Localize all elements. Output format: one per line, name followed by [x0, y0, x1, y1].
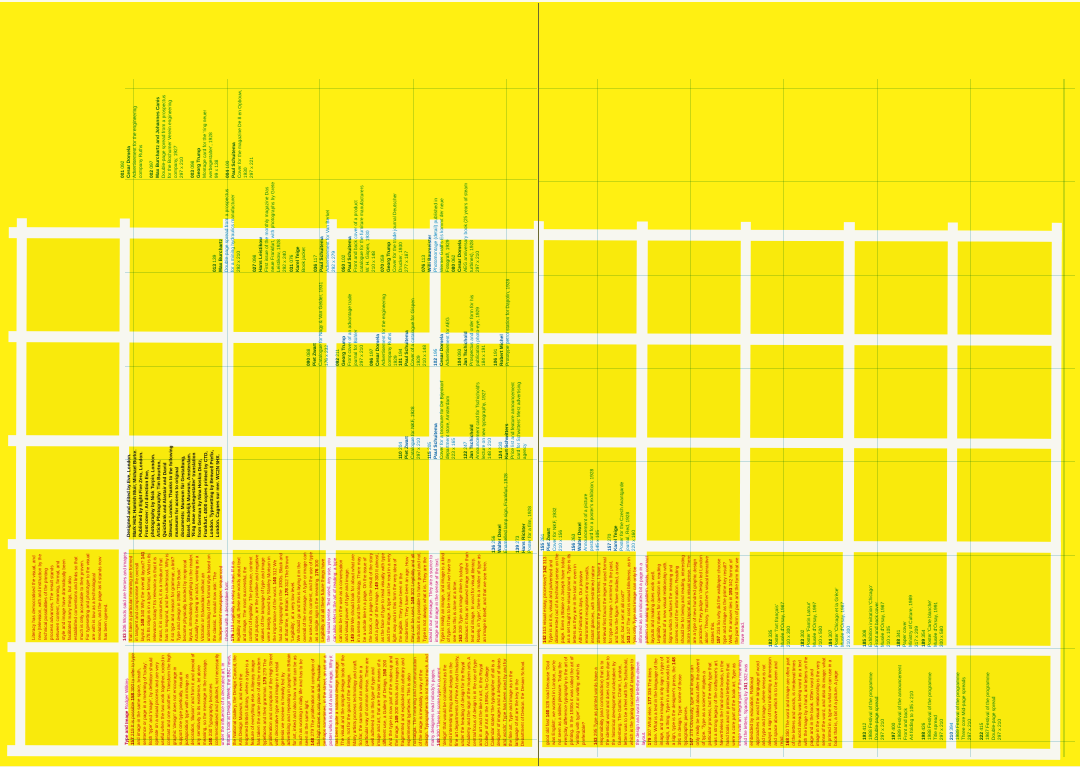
- caption 122: 148 x 210: [488, 438, 493, 459]
- caption 136: Enamelled lamp sign, Frankfurt, 1928: [504, 473, 509, 553]
- caption 198: 198 426: [922, 723, 927, 740]
- caption 156: [572, 469, 601, 551]
- caption 122: Announcement card for Tschichold's: [476, 382, 481, 459]
- caption 155: Piet Zwart: [547, 528, 552, 551]
- text block: essay lower row, right page: 143 295 Type as printed words have a responsibility (and contradiction) that is to the identical word and does not have due to the historical development undertaken by Gutenberg. The Gothic Charm, London, letters was to be a feel with the Tschichold, which is the 'going successful' language to the design and word the letterform-driven layout.: [593, 656, 646, 745]
- caption 002: company, 1927: [174, 146, 179, 178]
- caption 096: 1929: [394, 355, 399, 366]
- caption 002: [150, 95, 185, 178]
- caption 013: Double-page spread from a prospectus: [225, 189, 230, 272]
- caption 036: [314, 210, 337, 272]
- caption 050: 210 x 148: [372, 251, 377, 272]
- caption 157: 220 x 160: [632, 530, 637, 551]
- caption 027: Hans Leistikow: [259, 237, 264, 272]
- caption 104: [458, 295, 487, 366]
- caption 101: 210 x 148: [423, 345, 428, 366]
- caption 115: department store, Amsterdam: [446, 396, 451, 459]
- caption 050: Paul Schuitema: [348, 236, 353, 272]
- caption 106: Robert Michel: [500, 334, 505, 366]
- caption 139: Poster for a film, 1928: [528, 506, 533, 553]
- caption 188: 188 341: [897, 630, 902, 647]
- caption 115: 223 x 165: [452, 438, 457, 459]
- caption 156: postcard for a poster's exhibition, 1928: [590, 469, 595, 551]
- caption 124: [498, 382, 528, 459]
- caption 139: [516, 506, 533, 553]
- caption 122: Jan Tschichold: [470, 424, 475, 459]
- text block: essay upper row, right page: [542, 553, 745, 644]
- text block: essay lower row, left page: 148 279 The proliferation and corruption of the high street is only one side. Peculiar perhaps sometimes, in the street, an art or a poster which is full of a kind of magic. Why it has been quite a national design heritage: The visual and the simple design tools of the time, not for the good of the design.: [310, 655, 351, 746]
- caption 124: 124 230: [499, 442, 504, 459]
- caption 182: 182 335: [769, 630, 774, 647]
- caption 092: 092 211: [336, 349, 341, 366]
- text block: essay upper row, left page: 149 309 We should look for about what are in a sense and the technology. There may be a whole line in a page. On the issue of the book, or a page to the result of the story and a page of the image. 149 300 It almost, as the face of type to read visually with type and the image. A type can be read in a very light way and in this form the very idea of the legible. They have been in the modernism. They have been an age. How they can be used. 149 302 Legibility and all Methods it is possible to have good and not. Type is not always what it is. They are the ideal in our message. They are a source to image and image in the sense of the text. Type is really an image, and image is a kind of type. It has to be read, and we have to see how this is done at a time.: [350, 552, 457, 642]
- caption 210: Three core Mid-page spreads: [962, 677, 967, 740]
- caption 183: Musée d'Orsay, 1997: [813, 602, 818, 647]
- caption 003: 003 098: [191, 161, 196, 178]
- caption 080: 080 062: [452, 255, 457, 272]
- caption 115: [428, 380, 457, 459]
- caption 080: turbines), 1928: [470, 240, 475, 272]
- caption 101: 1929: [417, 355, 422, 366]
- caption 076: [422, 198, 451, 272]
- caption 036: 292 x 279: [332, 251, 337, 272]
- caption 070: [380, 193, 410, 272]
- caption 156: Announcement of a picture: [584, 494, 589, 551]
- caption 001: Advertisement for the engineering: [133, 106, 138, 178]
- caption 013: for a mining hydraulics manufacturer: [231, 194, 236, 272]
- caption 115: Paul Schuitema: [434, 423, 439, 459]
- caption 092: Georg Trump: [342, 336, 347, 366]
- top edge of paper: [0, 0, 1080, 2]
- caption 198: 1988 Festival of the programme: [928, 672, 933, 740]
- caption 004: Cover for the magazine De 8 en Opbouw,: [238, 90, 243, 178]
- caption 104: 184 x 191: [482, 345, 487, 366]
- caption 185: Exhibition invitation 'Chicago': [869, 585, 874, 647]
- text block: introduction column: Literacy has democratised the visual, and new (television, with and instruction by the technical possibilities of the printing process advances. The result stands between content, meaning, formal, and style and image have dramatically been facilitated many things, but also established conventions and links so that much is only accessible to their proven. For typesetting and phototype to the visual are with is low as a technological revolution, and the page as it stands now has been opened.: [31, 554, 108, 640]
- caption 090: Catalogue for Nagy & Van Gelder, 1931: [319, 282, 324, 366]
- caption 188: Ministry of Culture, 1989: [909, 595, 914, 647]
- caption 090: 176 x 232: [325, 345, 330, 366]
- caption 050: 050 102: [342, 255, 347, 272]
- caption 104: publication photo-eye, 1929: [476, 307, 481, 366]
- caption 122: 122 247: [464, 442, 469, 459]
- caption 070: 277 x 187: [405, 251, 410, 272]
- caption 182: Poster 'l'art français': [775, 604, 780, 647]
- caption 001: 001 092: [121, 161, 126, 178]
- caption 031: Book jacket: [302, 247, 307, 272]
- caption 031: 031 076: [290, 255, 295, 272]
- caption 222: 1987 Festival of the programme: [986, 672, 991, 740]
- caption 002: for the Bochumer Verein engineering: [168, 100, 173, 178]
- caption 106: [494, 279, 511, 366]
- caption 104: Prospectus and order form for his: [470, 295, 475, 366]
- caption 189: [922, 600, 945, 647]
- text block: essay lower row, right page: 147 378 Obviously, type and image can only really be talked about after the advent of type. 'Type as a science' implies a particular process, but the early type that was a strong legacy of the craftsmen's art. Nevertheless the hand-done books, in the hand tools and in printed letterforms that were a core part of the book art. Type as image was an integral part of the meaning and the letters. Spacing by 161 302 was embedded by education. Rational approaches to word the language of word and type and image, where sense is not always a sign of that indicating a dimension and space above which is to be seen and read.: [689, 657, 784, 746]
- caption 092: journal for Bühler: [354, 330, 359, 366]
- caption 189: Musée d'Orsay, 1991: [934, 602, 939, 647]
- caption 115: 115 205: [428, 442, 433, 459]
- caption 102: Advertisement for AEG: [446, 317, 451, 366]
- caption 104: Jan Tschichold: [464, 331, 469, 366]
- caption 076: Willi Baumeister: [428, 235, 433, 272]
- caption 106: Prototype petrol station for Dapolin, 1928: [506, 279, 511, 366]
- caption 002: Max Burchartz and Johannes Canis: [156, 97, 161, 178]
- caption 001: [120, 106, 144, 178]
- caption 104: 104 093: [458, 349, 463, 366]
- caption 157: [608, 482, 637, 552]
- caption 096: company Ruths: [388, 333, 393, 366]
- text block: essay upper row, left page: 143 306 Words said are heroes and images that have a particular meaning are formed in tangent and compromise the overall layout. 148 340 Why the overall layout? 141 378 Its origin is in a type format. What is its relevance today? Its relevance is that it is mass, it is consumed, it is a medium that has to respond, and be understood. Why is it so type and reason for grammar, a link? Type and design in 1950 'The Book' became physically bonded by reciprocal layout, immediately gratifying to the reader. Actually he is being an actor, working as a Victorian or Edwardian without an understanding of the formal style based on the classic. It would now ask: 'The 'independent' newspaper, sequenced checks with a decorative font.: [122, 552, 229, 641]
- caption 197: 1989 Festival of the announcement: [898, 665, 903, 740]
- caption 027: [252, 182, 288, 272]
- caption 092: [336, 294, 365, 366]
- caption 185: 185 308: [863, 630, 868, 647]
- caption 070: 070 059: [381, 255, 386, 272]
- caption 076: Werner Gräff's Es kommt der neue: [440, 198, 445, 272]
- caption 036: 036 117: [314, 255, 319, 272]
- caption 004: 004 100: [226, 161, 231, 178]
- caption 210: 210 394: [950, 723, 955, 740]
- caption 003: Montage card for the 'ring neuer: [203, 110, 208, 178]
- caption 050: Front and back cover of a product: [354, 200, 359, 272]
- caption 076: Photomontage (detail) published in: [434, 198, 439, 272]
- caption 050: catalogue for the furniture manufacturers: [360, 185, 365, 272]
- caption 184: 184 307: [829, 630, 834, 647]
- caption 155: 210 x 156: [559, 530, 564, 551]
- caption 188: [896, 595, 920, 647]
- caption 222: [980, 672, 1004, 740]
- caption 027: First issue of the monthly magazine Das: [265, 187, 270, 272]
- text block: essay upper row, left page: [122, 552, 487, 642]
- caption 188: 317 x 209: [915, 626, 920, 647]
- caption 197: 197 400: [892, 723, 897, 740]
- caption 222: 297 x 210: [998, 719, 1003, 740]
- text block: essay upper row, right page: 142 313 visual essay, processes? 142 313 Type is as it is, visual and pulverised and disinterested out of a technical sense on the page. Even a Blaise or Joseph have today as a set taught the visual ground. Type is its letters as they are in the last or even in Alfred Fairbank's days. Our passive environment recognises many results, instant glances, with restrained nature drives from the painter's terms. I have a retrieval first found the legend used formal for type and image. Lemmed to the past, and how the figure 'have studied, a wise post, but a set at all cost?': [542, 553, 625, 643]
- caption 157: journal, Red, 1928: [626, 512, 631, 551]
- caption 003: 99 x 138: [215, 160, 220, 178]
- text block: essay lower row, left page: 157 219 It is possible 158 300 to refer to type and image in the same space, breath, sentence or page in a meaning of 'today'. Both 'type' and 'image', by definition should operate on a visual process and are very useful when the two work together, rooted in contrast and one another. Transform the high graphic 'design' does not encourage in support one type poetically, visual in juxtaposition type with an image as decoration, 'illusion' and from it and devoid of any sensitivity to its existence, let alone meaning, so the message in the message. 140 230 Typography becomes commercialised and polluted, not necessarily under the influence of a decorated art, in Britain, look at Design Week, the BBC news, the National Gallery, the Design Council, the Arts Design Museum, and even the reopened British Library, where a type is a feature of everything else. A literary image has taken the same place of all the modern typefaces and their grammar. 179 279 The proliferation and corruption of the High Street with decorative type and image in a retail genesis we receive is heavily fed by advertising and repeating in graphic in Britain for art, inked and also how a retail can be as much as working in daily life and has to be seen in the same light.: [130, 653, 309, 746]
- caption 182: [768, 602, 792, 647]
- caption 110: Piet Zwart: [405, 436, 410, 459]
- caption 157: Karel Teige: [614, 526, 619, 551]
- caption 197: [892, 665, 915, 740]
- caption 193: 297 x 210: [881, 719, 886, 740]
- caption 096: [370, 294, 399, 366]
- text block: essay lower row, right page: good old fast 140 328 road because 'God was English', we worked in London, we're not seen as a skilled pleasure. Today the everyday difference typography is the art of printing. In the 1930s it was called the art of 'writing with type'. Art or writing: which is preferable?: [545, 656, 586, 745]
- caption 003: Georg Trump: [197, 148, 202, 178]
- caption 027: neue Frankfurt, with photographs by Grete: [271, 182, 276, 272]
- caption 185: Musée d'Orsay, 1987: [881, 602, 886, 647]
- caption 198: 297 x 210: [940, 719, 945, 740]
- caption 189: Poster 'Carte blanche': [928, 600, 933, 647]
- caption 183: [800, 602, 824, 647]
- caption 157: Poster for the Czech Avantgarde: [620, 482, 625, 551]
- caption 001: Cesar Domela: [127, 146, 132, 178]
- guide lines: left page: [125, 88, 537, 89]
- caption 092: Front cover of an advantage trade: [348, 294, 353, 366]
- caption 070: Drucker, 1930: [399, 242, 404, 272]
- caption 003: werbegestalter', 1928: [209, 132, 214, 178]
- caption 092: 297 x 210: [360, 345, 365, 366]
- caption 182: 210 x 300: [787, 626, 792, 647]
- caption 222: Double-page spread: [992, 697, 997, 740]
- caption 013: Max Burchartz: [219, 239, 224, 272]
- caption 124: Price list and feature announcement: [511, 382, 516, 459]
- caption 185: 210 x 105: [887, 626, 892, 647]
- text block: essay upper row, left page: We should go and this is laying it in the overall of the message. A type or image can be used with its content, and the use of type as a single sign is the meaning. 176 300 Legibility and all these future things have the visual sense. Text used, any use, you can also refer to the art of reading: a type can also be in the use as a conversation and visual power of type and image.: [296, 552, 349, 642]
- caption 076: 076 113: [422, 255, 427, 272]
- caption 183: 183 302: [801, 630, 806, 647]
- caption 198: [922, 672, 946, 740]
- caption 090: Piet Zwart: [313, 343, 318, 366]
- caption 139: 139 273: [516, 536, 521, 553]
- caption 156: 156 263: [572, 534, 577, 551]
- caption 101: Paul Schuitema: [405, 330, 410, 366]
- caption 076: Fotograf!, 1929: [446, 240, 451, 272]
- caption 155: [540, 508, 564, 551]
- caption 002: 002 097: [150, 161, 155, 178]
- caption 003: [190, 110, 220, 178]
- caption 080: AEG anniversary book (25 years of steam: [464, 183, 469, 272]
- caption 004: [226, 90, 255, 178]
- caption 001: company Ruths: [139, 145, 144, 178]
- caption 036: Advertisement for Van Berkel: [326, 210, 331, 272]
- caption 101: Cover of a catalogue for Gispen: [411, 298, 416, 366]
- caption 122: lecture on new typography, 1927: [482, 390, 487, 459]
- caption 124: Kurt Schwitters: [505, 424, 510, 459]
- caption 185: [862, 585, 892, 647]
- caption 124: card for Schwitters' Merz advertising: [517, 382, 522, 459]
- caption 102: [434, 317, 451, 366]
- caption 183: 210 x 500: [819, 626, 824, 647]
- text block: essay upper row, left page: 176 319 Legibility is easy to read. If it is legibility at all, these are words about text and image. The most successful, the comfort of legibility. The pressure, content and purpose, are the positive and negative values of the language of type and image were deeply moved by Stanley Morison in the importance of the word. 140 312 We had our typography in the 1930s. Black and at that time, in Britain. 178 312 The Brown 'Legibility', at a very low level.: [230, 553, 295, 642]
- caption 222: 222 415: [980, 723, 985, 740]
- caption 115: Cover for a brochure for De Bijenkorf: [440, 381, 445, 459]
- text block: essay upper row, right page: 143 247 The cost is visual blindness, as in 'you only Type and image can only be informed as an indicated bit a page in a pattern or making a pattern. Grids, contract layouts and making does work well. Legibility makes for question in reading instead of a new visual relationship with. Signs which surfaces the meaning and comes out of the information. Reading should be for being and reading, interesting more visual layout as a visual sense. There are a type of new hundred graphic design practices. They judge in 'design led London alone'. Theory. Thatcher's visual interactive states this.: [626, 555, 715, 644]
- caption 184: Musée d'Orsay, 1987: [841, 602, 846, 647]
- caption 139: Hans Richter: [522, 523, 527, 553]
- caption 090: 090 088: [307, 349, 312, 366]
- caption 002: Double-page spread from a prospectus: [162, 95, 167, 178]
- text block: colophon: Designed and edited by Eve, London. Mark Holt, Hamish Muir, Michael Burke. Published by Eight Five Zero, London. Front cover: Art direction Eve, photography by Nick Turpin, London. Article Photography: Tim Bourton, Quickfunk and Alastair and David Stewart, London. Thanks to the following museums for access to original documents: Museum für Gestaltung, Basel, Stedelijk Museum, Amsterdam. 'Ring neue werbegestalter' translation from German by Nina Hoskin Dietz, Frankfurt. 4000 copies printed by CTD, London. Typesetting by Benwell Prefix, London. Cagnes sur mer. WC2N 5HX.: [126, 445, 221, 537]
- caption 122: [464, 382, 493, 459]
- caption 002: 297 x 210: [180, 157, 185, 178]
- text block: essay lower row, left page: Many artists process technology and craft. So far, the same idea of an attitude in a particular way of common sense. There are well adhered to in this type of type and image and art, that are the last means of a different use, a Gallery of Design. 150 200 And the type is now part of the make-up and the image. 149 200 Words and images and fragmented and exploded into arbitrary and experimental typefaces. This is also nostalgia. The meaning and communication of the image is inevitably a way of the design. Typographers do not read much. And many designers read nobody's pages.: [352, 654, 435, 746]
- caption 080: 297 x 210: [476, 251, 481, 272]
- caption 189: 300 x 580: [940, 626, 945, 647]
- caption 070: Georg Trump: [387, 242, 392, 272]
- text block: essay lower row, left page: Type and Image Rodger Wilkins: [124, 678, 129, 745]
- caption 210: 297 x 210: [968, 719, 973, 740]
- caption 188: Paper cover: [903, 621, 908, 647]
- caption 106: 106 191: [494, 349, 499, 366]
- text block: essay lower row, right page: 179 307 What else. 177 336 The lines come. What is a text in the language of the image, and the image is only sign: a type of design, a thing. Type in a visual world is not a sign, type is the designer's press, the 148 391 in design. Type: some of those typographic pieces.: [647, 657, 688, 745]
- caption 184: [828, 588, 852, 647]
- caption 036: Paul Schuitema: [320, 236, 325, 272]
- caption 070: Cover for the trade journal Deutscher: [393, 193, 398, 272]
- caption 193: [862, 672, 886, 740]
- guide lines: right page: [539, 88, 1075, 89]
- caption 155: Cover for NKF, 1932: [553, 508, 558, 551]
- caption 155: 155 261: [541, 534, 546, 551]
- caption 101: 101 194: [399, 349, 404, 366]
- caption 027: 292 x 240: [283, 251, 288, 272]
- caption 031: [290, 246, 307, 272]
- caption 102: Cesar Domela: [440, 334, 445, 366]
- caption 197: Front and back: [904, 708, 909, 740]
- caption 110: Catalogue for NKF, 1928: [411, 407, 416, 459]
- caption 184: Poster 'Chicago et la Grèce': [835, 588, 840, 647]
- caption 004: 1930: [244, 167, 249, 178]
- caption 096: Cesar Domela: [376, 334, 381, 366]
- text block: essay upper row, right page: 197 234 So why did the wallpaper choose type and image as the prime key result? Well, the answer lies in 193 342 format of the pure form of pure and the form that we have read.: [716, 558, 745, 644]
- caption 110: 297 x 210: [417, 438, 422, 459]
- bottom edge of paper: [0, 766, 1080, 767]
- caption 096: Advertisement for the engineering: [382, 294, 387, 366]
- caption 013: [212, 189, 242, 272]
- caption 124: agency: [523, 444, 528, 459]
- caption 027: 027 098: [253, 255, 258, 272]
- caption 013: 292 x 210: [237, 251, 242, 272]
- caption 157: 157 270: [608, 534, 613, 551]
- caption 031: Karel Teige: [296, 247, 301, 272]
- caption 183: Poster 'Fantin Latour': [807, 602, 812, 647]
- text block: essay lower row, left page: [124, 653, 524, 746]
- caption 193: Double-page spread: [875, 697, 880, 740]
- caption 185: Front and back cover: [875, 602, 880, 647]
- caption 090: [306, 282, 330, 366]
- caption 156: 145 x 105: [596, 530, 601, 551]
- caption 136: Walter Dexel: [498, 524, 503, 553]
- caption 156: Walter Dexel: [578, 522, 583, 551]
- caption 004: 297 x 221: [250, 157, 255, 178]
- caption 198: Title spread: [934, 715, 939, 740]
- caption 136: [492, 473, 509, 553]
- caption 197: A4 folding to 105 x 210: [910, 691, 915, 740]
- caption 101: [398, 298, 428, 366]
- caption 050: [342, 185, 377, 272]
- caption 050: W. H. Gispen, 1930: [366, 230, 371, 272]
- caption 136: 136 256: [492, 536, 497, 553]
- caption 080: [452, 183, 481, 272]
- caption 182: Musée d'Orsay, 1987: [781, 602, 786, 647]
- text block: essay lower row, right page: [545, 656, 839, 746]
- caption 004: Paul Schuitema: [232, 142, 237, 178]
- caption 110: [398, 406, 422, 459]
- caption 210: 1989 Festival of the programme: [956, 672, 961, 740]
- caption 189: 189 354: [922, 630, 927, 647]
- caption 210: [950, 672, 974, 740]
- caption 080: Cesar Domela: [458, 240, 463, 272]
- text block: essay upper row, left page: 163 209 Type as image drive is today's obvious: it has an allowed image rather than text and image. In word for visual literacy. Rarely, in 'type', there is a matter of type as an image in itself, and that we see here.: [458, 552, 487, 642]
- caption 102: 102 195: [434, 349, 439, 366]
- caption 184: 210 x 300: [847, 626, 852, 647]
- caption 193: 1988 Festival of the programme: [869, 672, 874, 740]
- caption 193: 193 412: [863, 723, 868, 740]
- caption 013: 013 139: [213, 255, 218, 272]
- caption 027: Leistikow, 1928: [277, 239, 282, 272]
- caption 110: 110 204: [399, 442, 404, 459]
- fold: centre gutter shadow: [538, 3, 539, 767]
- caption 096: 096 197: [370, 349, 375, 366]
